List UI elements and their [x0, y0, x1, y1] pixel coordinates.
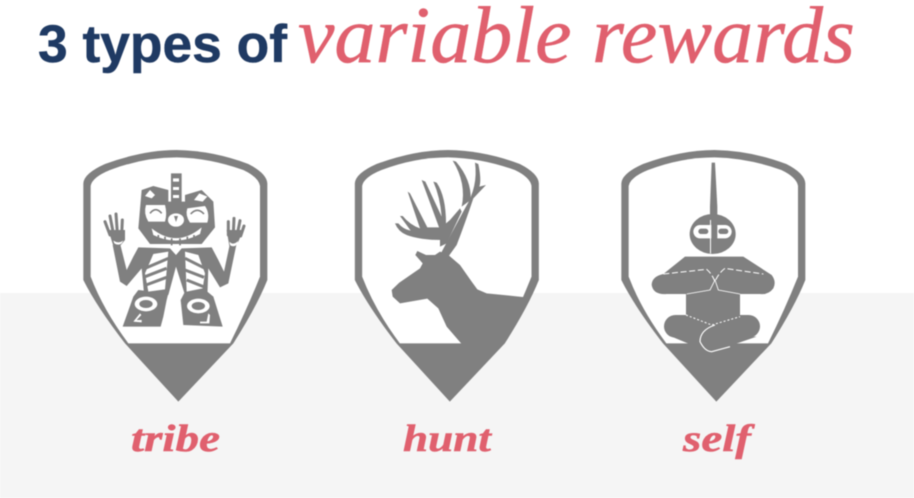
label: hunt: hunt — [403, 418, 493, 460]
icon: totem figure — [105, 173, 244, 327]
title: 3 types of — [38, 15, 287, 74]
label: tribe: tribe — [131, 418, 220, 460]
badge: self — [621, 150, 805, 402]
badge: hunt — [355, 150, 539, 402]
badge: tribe — [83, 150, 267, 402]
title — [38, 0, 855, 80]
icon: stag — [392, 161, 526, 344]
icon: meditating ninja — [652, 163, 775, 353]
label: self: self — [682, 418, 755, 460]
